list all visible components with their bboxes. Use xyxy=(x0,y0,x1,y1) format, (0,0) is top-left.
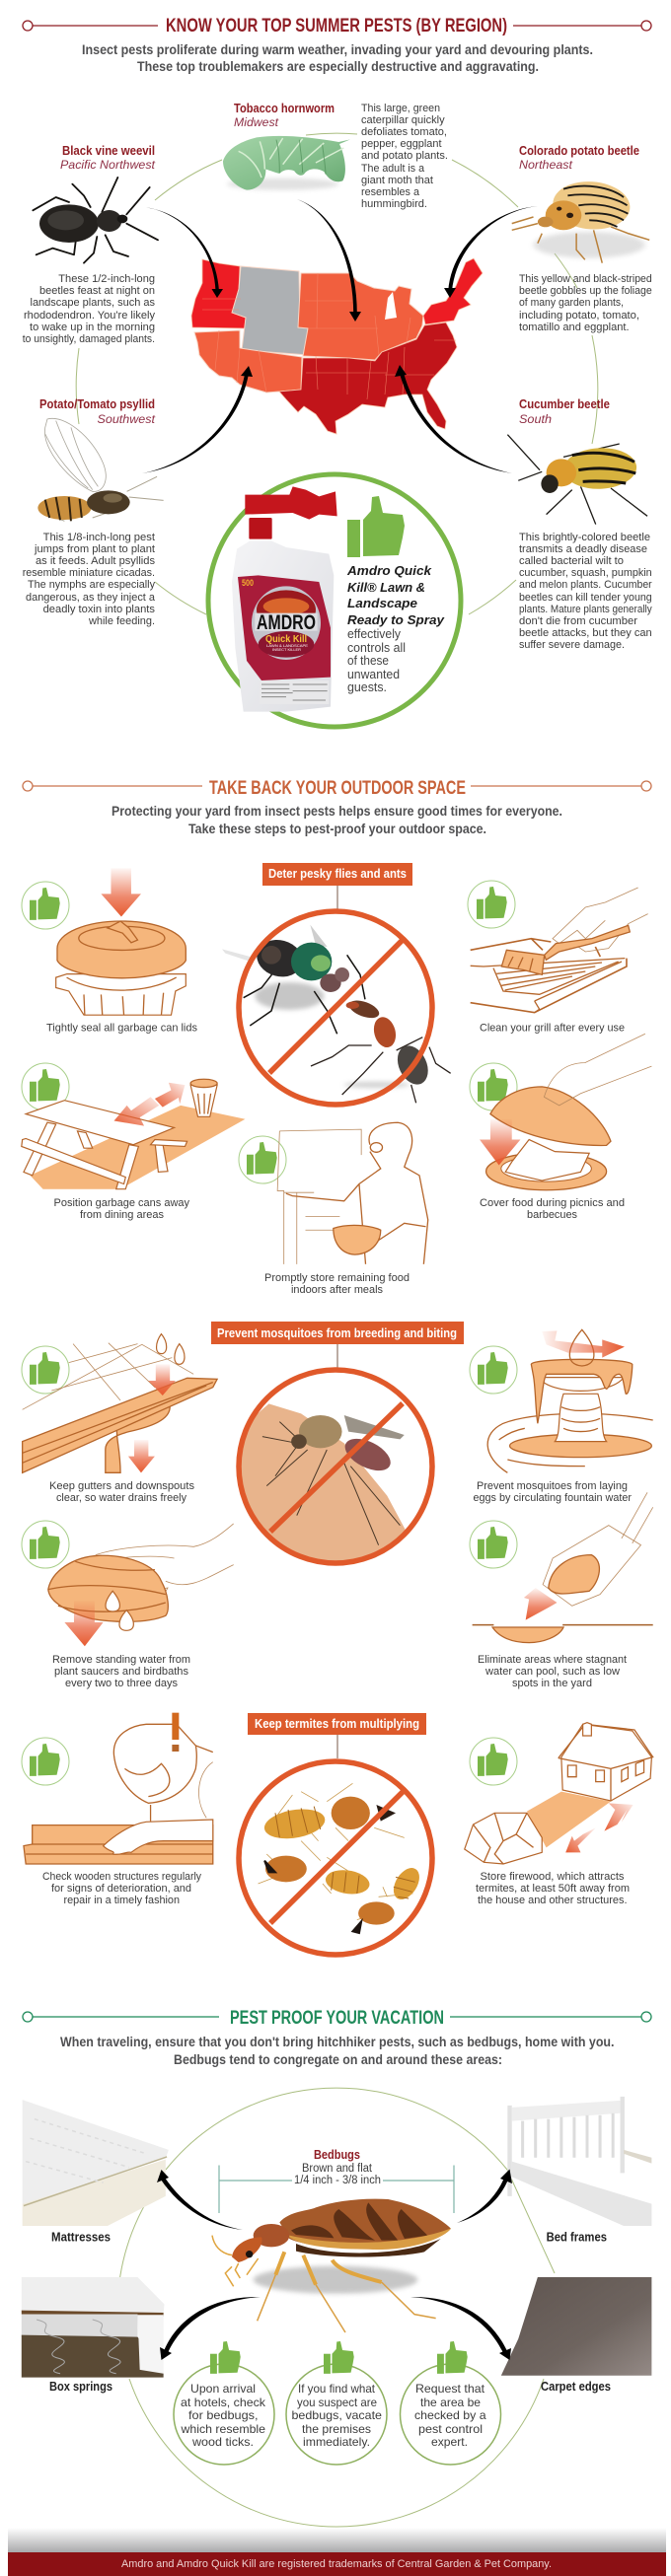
label: cucumber beetle xyxy=(519,396,610,426)
product text: effectively xyxy=(347,627,402,641)
arrow: weevil to map xyxy=(142,207,223,298)
description: psyllid: dangerous, as they inject a xyxy=(26,592,156,604)
heading: pest proof your vacation xyxy=(23,2008,651,2029)
caption: Check wooden structures regularly xyxy=(42,1871,201,1883)
product text: Landscape xyxy=(347,596,417,610)
illustration: shovel and ground xyxy=(473,1492,653,1643)
illustration: man at refrigerator xyxy=(277,1122,428,1264)
banner: prevent mosquitoes: Prevent mosquitoes from breeding and biting xyxy=(217,1325,457,1340)
illustration: garbage can xyxy=(56,868,186,1015)
description: psyllid: This 1/8-inch-long pest xyxy=(43,532,155,543)
caption: Cover food during picnics and xyxy=(480,1197,625,1209)
region: grey states xyxy=(232,266,309,355)
tip text: Request that xyxy=(415,2382,485,2396)
description: Colorado beetle: including potato, tomato, xyxy=(519,310,639,322)
icon: thumbs up badge xyxy=(470,1738,517,1785)
icon: cucumber beetle illustration xyxy=(507,435,647,525)
description: weevil: These 1/2-inch-long xyxy=(58,273,155,285)
description: cucumber beetle: transmits a deadly disease xyxy=(519,543,647,555)
step: store firewood xyxy=(465,1723,653,1906)
caption: from dining areas xyxy=(80,1209,164,1221)
description: Colorado beetle xyxy=(519,273,652,333)
step: keep gutters clear xyxy=(22,1334,217,1504)
description: psyllid: as it feeds. Adult psyllids xyxy=(36,555,156,567)
description: weevil: to unsightly, damaged plants. xyxy=(23,333,155,345)
caption: Store firewood, which attracts xyxy=(480,1871,625,1883)
tip text: for bedbugs, xyxy=(188,2408,259,2422)
tip circle: if you find bedbugs xyxy=(286,2341,387,2465)
no sign: termites xyxy=(239,1761,432,1955)
label: potato/tomato psyllid: Southwest xyxy=(97,412,156,426)
description: Colorado beetle: of many garden plants, xyxy=(519,297,624,309)
description: Colorado beetle: beetle gobbles up the foliage xyxy=(519,285,652,297)
caption: Eliminate areas where stagnant xyxy=(478,1654,627,1666)
tip text: the premises xyxy=(302,2422,371,2436)
label: potato/tomato psyllid xyxy=(39,396,156,426)
label: Colorado potato beetle xyxy=(519,143,639,172)
caption: Clean your grill after every use xyxy=(480,1022,625,1034)
icon: bedbug xyxy=(212,2199,451,2332)
illustration: plant saucer xyxy=(48,1524,234,1646)
tip text: expert. xyxy=(431,2435,468,2449)
label: Carpet edges xyxy=(541,2379,611,2394)
intro text xyxy=(60,2034,614,2067)
photo: carpet edge xyxy=(501,2277,651,2394)
illustration: grill and brush xyxy=(471,888,648,1013)
icon: thumbs up badge xyxy=(22,882,69,929)
tip text xyxy=(414,2382,486,2449)
caption: every two to three days xyxy=(65,1678,178,1689)
section 1: top summer pests xyxy=(23,16,652,727)
lake Michigan xyxy=(385,292,397,320)
arrow: Colorado beetle to map xyxy=(444,206,538,298)
thin connecting circle arcs xyxy=(117,2088,555,2527)
description: hornworm: caterpillar quickly xyxy=(361,114,445,126)
caption xyxy=(53,1197,189,1221)
tip text: immediately. xyxy=(303,2435,370,2449)
description: cucumber beetle: beetles can kill tender young xyxy=(519,592,652,604)
description: psyllid: resemble miniature cicadas. xyxy=(23,567,155,579)
icon: thumbs up xyxy=(347,496,405,557)
step: check wooden structures xyxy=(22,1713,213,1906)
caption: for signs of deterioration, and xyxy=(51,1883,191,1895)
description: hornworm: and potato plants. xyxy=(361,150,448,162)
description: weevil: to wake up in the morning xyxy=(30,322,155,333)
description: Colorado beetle: tomatillo and eggplant. xyxy=(519,322,630,333)
step: position garbage cans away xyxy=(22,1063,245,1221)
label: tobacco hornworm: Midwest xyxy=(234,115,279,129)
caption: termites, at least 50ft away from xyxy=(476,1883,630,1895)
caption xyxy=(474,1480,632,1504)
region: Northeast xyxy=(423,258,483,324)
banner: keep termites from multiplying: Keep termites from multiplying xyxy=(255,1716,419,1731)
description: weevil: beetles feast at night on xyxy=(39,285,155,297)
bedbug size callout: 1/4 inch - 3/8 inch xyxy=(294,2175,381,2186)
step: eliminate stagnant water xyxy=(470,1492,653,1689)
intro text: Take these steps to pest-proof your outdoor space. xyxy=(188,821,486,836)
banner: deter flies and ants xyxy=(262,863,412,909)
tip text: Upon arrival xyxy=(190,2382,256,2396)
product bottle: AMDRO xyxy=(257,611,316,634)
step: clean grill xyxy=(468,881,648,1034)
illustration: house and firewood xyxy=(465,1723,653,1864)
region: South xyxy=(279,322,457,434)
bedbug size callout: Brown and flat xyxy=(302,2163,373,2175)
caption xyxy=(49,1480,195,1504)
icon: hornworm illustration xyxy=(223,136,350,190)
description: hornworm: defoliates tomato, xyxy=(361,126,447,138)
tip text: pest control xyxy=(418,2422,483,2436)
arrow: to bed frames xyxy=(457,2170,512,2223)
icon: thumbs up badge xyxy=(22,1346,69,1394)
tip text: bedbugs, vacate xyxy=(292,2408,382,2422)
illustration: gutter and downspout xyxy=(23,1334,217,1472)
label: Bed frames xyxy=(547,2229,607,2245)
section 2: take back your outdoor space xyxy=(22,778,653,1955)
product bottle: 500 xyxy=(242,578,254,588)
illustration: picnic table xyxy=(22,1079,245,1189)
step: remove standing water xyxy=(22,1521,234,1689)
pest: cucumber beetle xyxy=(507,396,652,651)
tip circle: upon arrival xyxy=(174,2341,274,2465)
description: cucumber beetle xyxy=(519,532,652,651)
description: hornworm: This large, green xyxy=(361,103,440,114)
product text: Amdro Quick xyxy=(346,563,432,578)
intro text: When traveling, ensure that you don't bring hitchhiker pests, such as bedbugs, home with you. xyxy=(60,2034,614,2049)
map of United States by region xyxy=(191,258,483,434)
banner: prevent mosquitoes xyxy=(211,1322,464,1368)
thin connecting circle arcs xyxy=(76,133,598,614)
illustration: fountain xyxy=(487,1329,653,1472)
label: black vine weevil: Black vine weevil xyxy=(62,143,155,158)
caption xyxy=(264,1272,410,1296)
pest: potato/tomato psyllid xyxy=(23,396,164,627)
region: Midwest xyxy=(298,273,423,360)
no sign: fly and ant xyxy=(222,911,451,1105)
caption: the house and other structures. xyxy=(478,1895,628,1906)
intro text: Protecting your yard from insect pests helps ensure good times for everyone. xyxy=(112,803,562,819)
caption xyxy=(478,1654,627,1689)
tip text: you suspect are xyxy=(297,2396,377,2409)
pest: Colorado potato beetle xyxy=(512,143,652,333)
tip text: which resemble xyxy=(180,2422,265,2436)
caption: repair in a timely fashion xyxy=(63,1895,180,1906)
product text: Ready to Spray xyxy=(347,612,445,627)
tip text: If you find what xyxy=(298,2382,376,2396)
tip text xyxy=(180,2382,266,2449)
product callout: Amdro Quick Kill xyxy=(208,474,461,727)
description: cucumber beetle: plants. Mature plants generally xyxy=(519,604,652,615)
description: hornworm xyxy=(361,103,448,210)
icon: thumbs up badge xyxy=(22,1521,69,1568)
caption xyxy=(52,1654,190,1689)
description: Colorado beetle: This yellow and black-striped xyxy=(519,273,652,285)
pest: black vine weevil xyxy=(23,143,158,345)
icon: psyllid illustration xyxy=(37,418,164,521)
description: weevil: rhododendron. You're likely xyxy=(24,310,155,322)
label: Colorado potato beetle: Northeast xyxy=(519,158,573,172)
caption: Position garbage cans away xyxy=(53,1197,189,1209)
region: Southwest xyxy=(194,330,302,393)
icon: thumbs up xyxy=(437,2341,468,2374)
description: weevil xyxy=(23,273,155,345)
icon: thumbs up badge xyxy=(468,881,515,928)
product bottle: Quick Kill xyxy=(265,634,307,645)
arrow: to carpet edges xyxy=(410,2297,511,2360)
caption: eggs by circulating fountain water xyxy=(474,1492,632,1504)
label: black vine weevil: Pacific Northwest xyxy=(60,158,156,172)
arrow: psyllid to map xyxy=(142,366,253,473)
tip text xyxy=(292,2382,382,2449)
label: tobacco hornworm: Tobacco hornworm xyxy=(234,101,335,115)
icon: thumbs up badge xyxy=(239,1136,286,1183)
heading: take back your outdoor space xyxy=(23,778,651,799)
step: store food indoors xyxy=(239,1122,428,1296)
description: cucumber beetle: suffer severe damage. xyxy=(519,639,625,651)
icon: thumbs up xyxy=(210,2341,241,2374)
tip text: the area be xyxy=(420,2396,481,2409)
illustration: covered food plate xyxy=(480,1034,651,1190)
arrow: hornworm to map xyxy=(297,199,361,322)
icon: thumbs up badge xyxy=(470,1521,517,1568)
photo: box springs xyxy=(22,2277,165,2394)
caption xyxy=(476,1871,630,1906)
icon: thumbs up xyxy=(324,2341,354,2374)
caption: barbecues xyxy=(527,1209,577,1221)
icon: Colorado beetle illustration xyxy=(512,177,649,263)
description: psyllid: deadly toxin into plants xyxy=(43,604,155,615)
label: black vine weevil xyxy=(60,143,156,172)
footer xyxy=(8,2528,666,2576)
description: psyllid: jumps from plant to plant xyxy=(34,543,155,555)
heading: know your top summer pests xyxy=(23,16,651,36)
caption: Tightly seal all garbage can lids xyxy=(46,1022,197,1034)
section 3: pest proof your vacation xyxy=(22,2008,651,2527)
banner: keep termites from multiplying xyxy=(248,1713,426,1758)
caption: Promptly store remaining food xyxy=(264,1272,410,1284)
description: cucumber beetle: cucumber, squash, pumpkin xyxy=(519,567,652,579)
description: hornworm: resembles a xyxy=(361,186,420,198)
pest: tobacco hornworm xyxy=(223,101,448,210)
description: cucumber beetle: don't die from cucumber xyxy=(519,615,637,627)
label: cucumber beetle: Cucumber beetle xyxy=(519,396,610,411)
caption xyxy=(42,1871,201,1906)
caption: water can pool, such as low xyxy=(485,1666,620,1678)
tip text: at hotels, check xyxy=(181,2396,266,2409)
bedbug size callout xyxy=(219,2147,454,2213)
step: circulate fountain water xyxy=(470,1329,653,1504)
icon: thumbs up badge xyxy=(470,1346,517,1394)
product bottle: INSECT KILLER xyxy=(272,647,301,652)
caption: Remove standing water from xyxy=(52,1654,190,1666)
label: potato/tomato psyllid: Potato/Tomato psyllid xyxy=(39,396,155,411)
description: cucumber beetle: This brightly-colored beetle xyxy=(519,532,650,543)
tip text: wood ticks. xyxy=(191,2435,254,2449)
caption: clear, so water drains freely xyxy=(56,1492,186,1504)
label: Colorado potato beetle: Colorado potato beetle xyxy=(519,143,639,158)
description: hornworm: hummingbird. xyxy=(361,198,427,210)
icon: thumbs up badge xyxy=(22,1738,69,1785)
product text xyxy=(346,563,445,694)
caption: Keep gutters and downspouts xyxy=(49,1480,195,1492)
caption xyxy=(480,1197,625,1221)
product text: Kill® Lawn & xyxy=(347,580,425,595)
intro text xyxy=(82,41,593,74)
icon: thumbs up badge xyxy=(22,1063,69,1110)
region: Pacific Northwest xyxy=(191,259,246,328)
footer: Amdro and Amdro Quick Kill are registered trademarks of Central Garden & Pet Company. xyxy=(121,2558,552,2570)
label: cucumber beetle: South xyxy=(519,412,552,426)
illustration: man inspecting wood xyxy=(24,1713,213,1864)
intro text: These top troublemakers are especially destructive and aggravating. xyxy=(137,58,539,74)
tip text: checked by a xyxy=(414,2408,486,2422)
description: hornworm: pepper, eggplant xyxy=(361,138,442,150)
product text: of these xyxy=(347,654,389,668)
intro text: Insect pests proliferate during warm weather, invading your yard and devouring plants. xyxy=(82,41,593,57)
step: seal garbage can lids xyxy=(22,868,197,1034)
description: weevil: landscape plants, such as xyxy=(30,297,155,309)
arrow: to box springs xyxy=(160,2297,261,2360)
description: hornworm: giant moth that xyxy=(361,175,433,186)
heading: take back your outdoor space: TAKE BACK YOUR OUTDOOR SPACE xyxy=(209,778,466,799)
arrow: to mattresses xyxy=(157,2170,243,2230)
banner: deter flies and ants: Deter pesky flies and ants xyxy=(268,866,407,881)
description: psyllid: The nymphs are especially xyxy=(28,579,155,591)
description: psyllid xyxy=(23,532,156,627)
tip circle: request expert xyxy=(401,2341,501,2465)
bedbug size callout: Bedbugs xyxy=(314,2147,360,2162)
description: cucumber beetle: beetle attacks, but they can xyxy=(519,627,652,639)
heading: know your top summer pests: KNOW YOUR TOP SUMMER PESTS (BY REGION) xyxy=(166,16,507,36)
caption: indoors after meals xyxy=(291,1284,383,1296)
photo: bed frame xyxy=(507,2097,651,2245)
caption: Prevent mosquitoes from laying xyxy=(477,1480,628,1492)
arrow: cucumber beetle to map xyxy=(395,365,512,473)
description: cucumber beetle: called bacterial wilt to xyxy=(519,555,624,567)
icon: weevil illustration xyxy=(33,178,158,263)
caption: plant saucers and birdbaths xyxy=(54,1666,188,1678)
description: cucumber beetle: and melon plants. Cucumber xyxy=(519,579,652,591)
heading: pest proof your vacation: PEST PROOF YOUR VACATION xyxy=(230,2008,444,2029)
icon: thumbs up badge xyxy=(470,1063,517,1110)
green circle xyxy=(208,474,461,727)
product text: unwanted xyxy=(347,668,400,681)
label: Box springs xyxy=(49,2379,112,2394)
label: tobacco hornworm xyxy=(234,101,335,129)
label: Mattresses xyxy=(51,2229,111,2245)
step: cover food xyxy=(470,1034,651,1221)
description: psyllid: while feeding. xyxy=(88,615,155,627)
product bottle: LAWN & LANDSCAPE xyxy=(266,643,308,648)
intro text xyxy=(112,803,562,836)
product text: guests. xyxy=(347,680,387,694)
intro text: Bedbugs tend to congregate on and around these areas: xyxy=(174,2051,502,2067)
product bottle xyxy=(232,486,337,712)
description: hornworm: The adult is a xyxy=(361,163,425,175)
photo: mattress xyxy=(23,2100,169,2245)
caption: spots in the yard xyxy=(512,1678,592,1689)
product text: controls all xyxy=(347,641,406,655)
no sign: mosquito on skin xyxy=(239,1370,432,1565)
